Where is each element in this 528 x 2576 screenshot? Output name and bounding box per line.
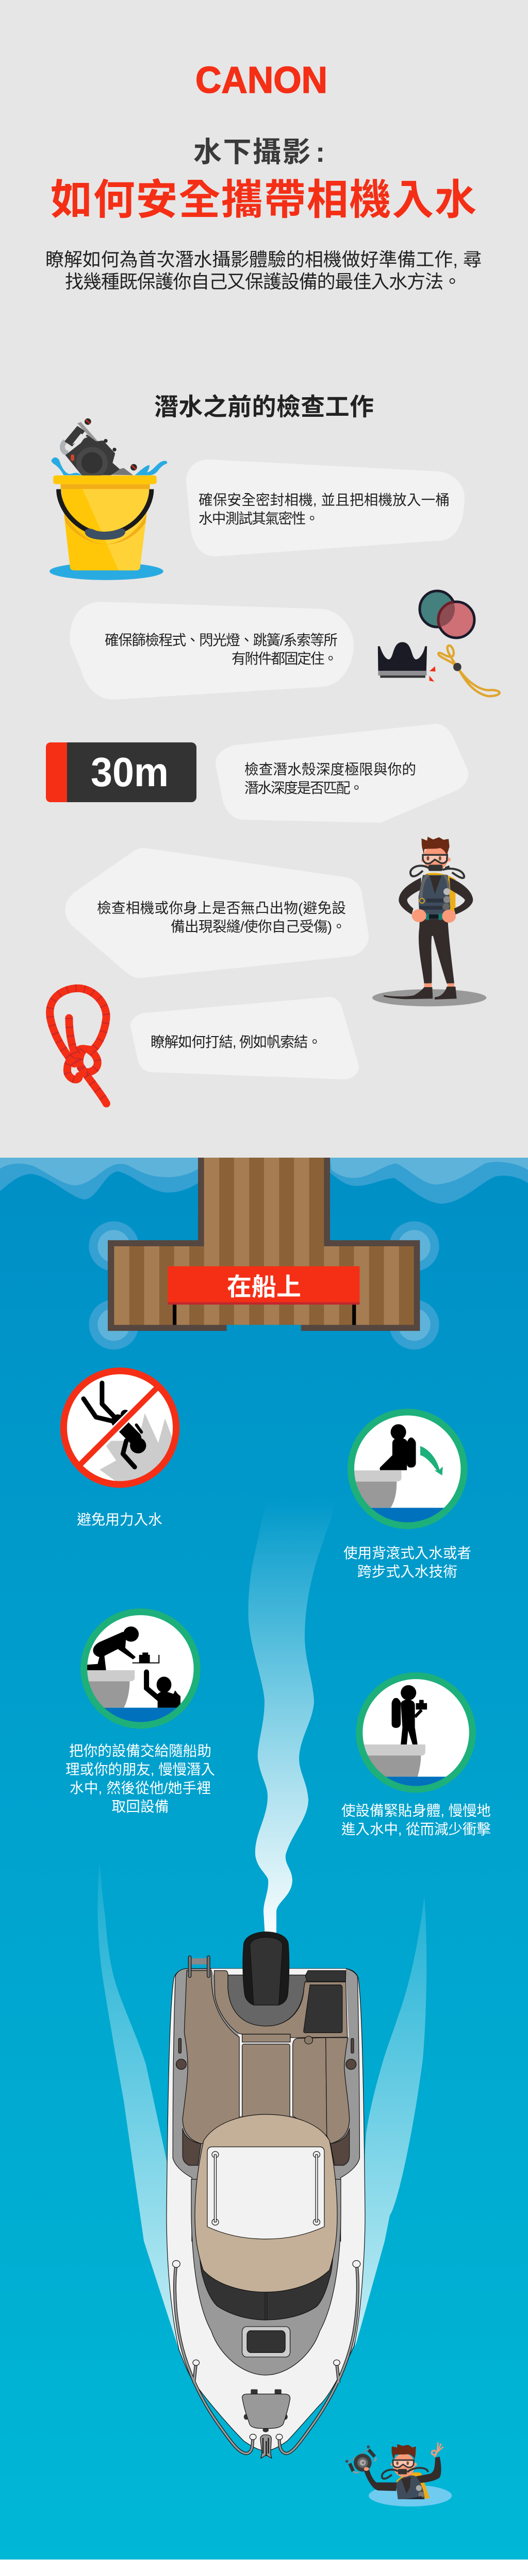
panel: accessories bubble	[70, 602, 354, 700]
boat wake: right	[355, 1896, 426, 2347]
boat wake: centre	[248, 1501, 337, 1937]
panel: protrusion check bubble: 檢查相機或你身上是否無凸出物(避免設	[97, 900, 346, 916]
camera housing and splash	[51, 418, 167, 479]
icon: filters, lens hood and strap	[378, 591, 500, 696]
panel: protrusion check bubble	[65, 848, 369, 978]
caption: hand gear to assistant: 理或你的朋友, 慢慢潛入	[65, 1761, 215, 1777]
sign label: 在船上	[227, 1274, 301, 1301]
panel: depth limit bubble: 潛水深度是否匹配。	[244, 776, 364, 797]
boat	[167, 1932, 365, 2458]
boat wake: left	[97, 1862, 179, 2350]
panel: seal test bubble: 確保安全密封相機, 並且把相機放入一桶	[199, 492, 450, 508]
depth badge: 30m	[46, 742, 196, 802]
caption: hand gear to assistant	[65, 1743, 215, 1815]
cabin roof	[195, 2114, 337, 2292]
panel: seal test bubble: 水中測試其氣密性。	[199, 507, 319, 528]
footer panel	[0, 2560, 528, 2576]
cabin hatch panel	[207, 2147, 324, 2239]
panel: knot bubble	[130, 997, 359, 1079]
caption: back roll entry: 跨步式入水技術	[357, 1564, 457, 1580]
icon: camera in water bucket	[50, 418, 167, 580]
caption: avoid forceful entry: 避免用力入水	[77, 1512, 162, 1528]
bumpers	[89, 1222, 439, 1349]
panel: accessories bubble: 確保篩檢程式、閃光燈、跳簧/系索等所	[105, 632, 338, 648]
depth badge: 30m: 30m	[91, 749, 169, 795]
icon: standing diver	[372, 837, 486, 1006]
caption: back roll entry: 使用背滾式入水或者	[343, 1545, 471, 1561]
panel: knot bubble: 瞭解如何打結, 例如帆索結。	[151, 1030, 322, 1051]
panel: protrusion check bubble: 備出現裂縫/使你自己受傷)。	[171, 915, 346, 936]
panel: seal test bubble	[186, 460, 465, 556]
icon: red rope knot	[50, 988, 106, 1104]
caption: hand gear to assistant: 取回設備	[111, 1799, 169, 1815]
rails	[173, 2261, 360, 2453]
bumpers and dock	[89, 1158, 439, 1349]
intro paragraph	[45, 249, 482, 294]
hull	[167, 1969, 365, 2451]
sign legs	[173, 1304, 356, 1325]
panel: depth limit bubble: 檢查潛水殼深度極限與你的	[244, 761, 416, 777]
hatch slots	[212, 2151, 320, 2225]
panel: accessories bubble: 有附件都固定住。	[232, 647, 338, 668]
camera held up	[345, 2445, 376, 2472]
heading: pre-dive checks: 潛水之前的檢查工作	[154, 393, 374, 420]
subtitle: 水下攝影	[193, 136, 312, 168]
subtitle: :	[316, 136, 326, 168]
title block	[51, 136, 476, 224]
lens hood and strap	[378, 642, 500, 696]
main title: 如何安全攜帶相機入水	[51, 177, 476, 224]
caption: hold gear close	[341, 1803, 491, 1837]
bow fittings	[242, 2327, 290, 2458]
icon: avoid forceful entry	[63, 1371, 178, 1485]
logo: CANON: CANON	[195, 60, 327, 101]
icon: diver in water with camera	[345, 2443, 452, 2506]
icon: hold gear close and step in	[357, 1676, 478, 1793]
caption: hold gear close: 進入水中, 從而減少衝擊	[341, 1821, 491, 1837]
icon: hand gear to assistant	[81, 1612, 202, 1728]
caption: hold gear close: 使設備緊貼身體, 慢慢地	[341, 1803, 491, 1819]
sign board	[168, 1266, 360, 1304]
waves	[0, 1158, 528, 1204]
dock	[108, 1158, 420, 1331]
stern deck	[173, 1932, 359, 2241]
intro paragraph: 瞭解如何為首次潛水攝影體驗的相機做好準備工作, 尋	[45, 249, 482, 270]
caption: hand gear to assistant: 把你的設備交給隨船助	[69, 1743, 211, 1759]
bucket	[50, 476, 163, 580]
icon: back roll entry	[350, 1412, 465, 1526]
intro paragraph: 找幾種既保護你自己又保護設備的最佳入水方法。	[65, 267, 461, 294]
panel: depth limit bubble	[216, 724, 468, 823]
foredeck and windshield	[191, 2179, 341, 2375]
panel: sea background	[0, 1158, 528, 2560]
caption: hand gear to assistant: 水中, 然後從他/她手裡	[70, 1780, 211, 1796]
filters	[420, 591, 474, 638]
caption: back roll entry	[343, 1545, 471, 1580]
